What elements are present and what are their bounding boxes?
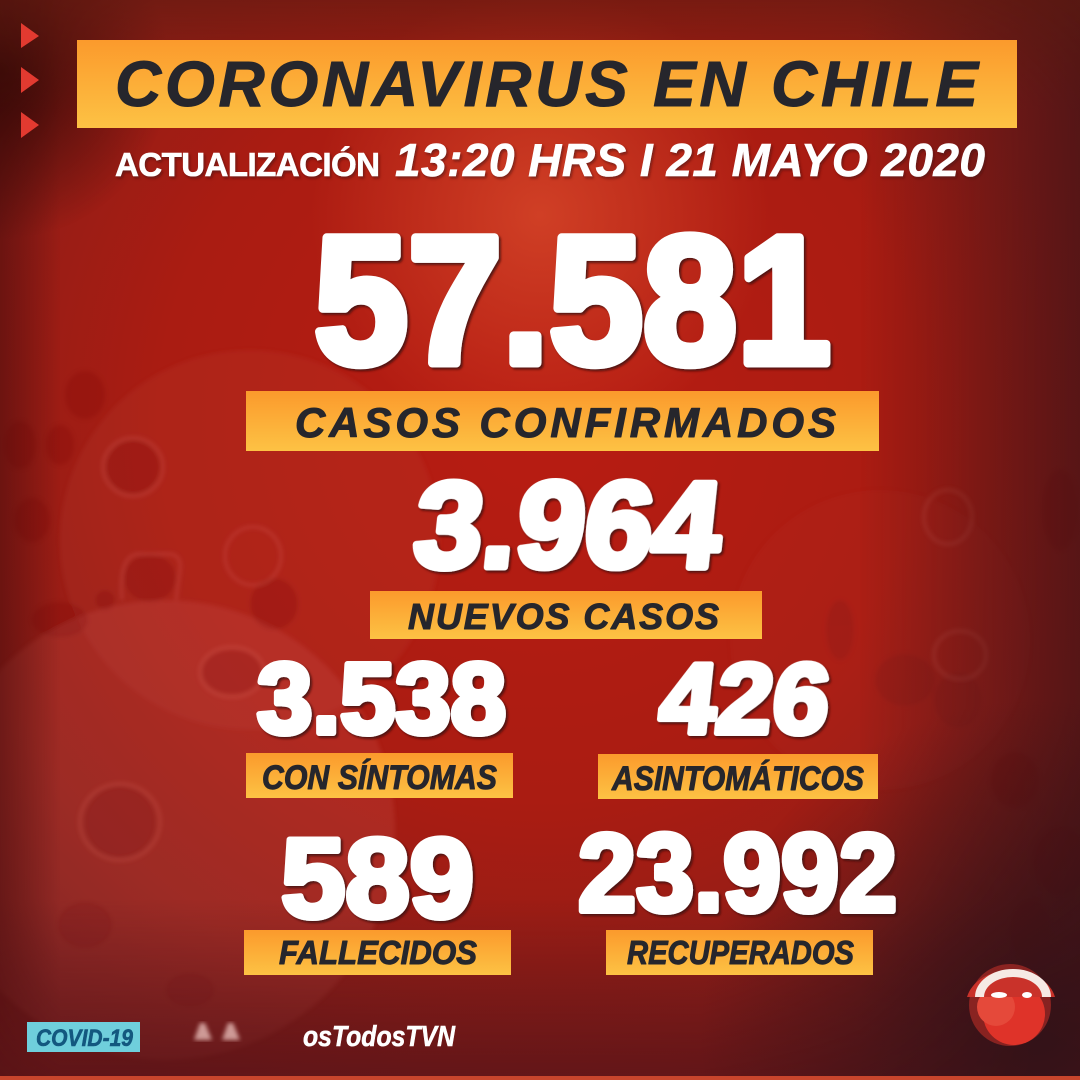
stat: asymptomatic: 426 — [655, 643, 835, 755]
stat: new cases: 3.964 — [408, 456, 729, 593]
stat: confirmed cases: CASOS CONFIRMADOS — [295, 399, 836, 446]
stat: with symptoms: CON SÍNTOMAS — [262, 759, 497, 797]
stat: recovered: RECUPERADOS — [627, 934, 854, 971]
hashtag: osTodosTVN — [303, 1021, 456, 1053]
stat: with symptoms: 3.538 — [257, 643, 506, 755]
stat: deaths — [244, 816, 511, 975]
tag: COVID-19: COVID-19 — [36, 1025, 134, 1052]
title banner: CORONAVIRUS EN CHILE — [115, 48, 980, 120]
icon: TVN logo — [967, 964, 1055, 1046]
icon: three play arrows — [21, 23, 39, 138]
stat: asymptomatic: ASINTOMÁTICOS — [611, 760, 864, 798]
update timestamp: ACTUALIZACIÓN — [115, 146, 380, 183]
stat: deaths: 589 — [281, 816, 474, 941]
update timestamp: 13:20 HRS I 21 MAYO 2020 — [395, 134, 985, 186]
stat: deaths: FALLECIDOS — [279, 934, 477, 971]
stat: recovered: 23.992 — [578, 812, 897, 935]
stat: confirmed cases: 57.581 — [314, 198, 831, 402]
background: faint virus illustrations — [0, 350, 1080, 1060]
stat: new cases — [370, 456, 762, 639]
stat: new cases: NUEVOS CASOS — [408, 596, 719, 637]
stat: with symptoms — [246, 643, 513, 798]
bottom strip — [0, 1076, 1080, 1080]
decorative lights — [194, 1023, 240, 1040]
update timestamp — [115, 134, 985, 186]
stat: asymptomatic — [598, 643, 878, 799]
